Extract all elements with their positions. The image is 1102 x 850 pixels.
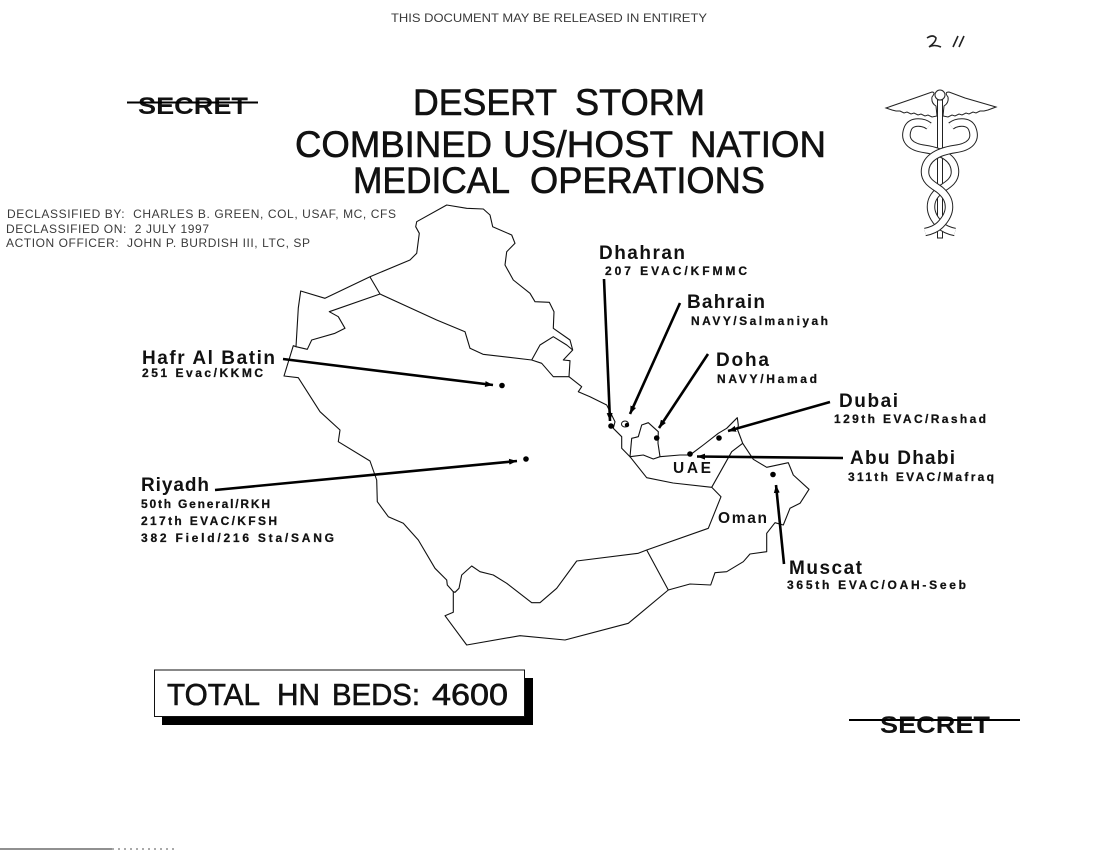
- callout: Muscat: Muscat: [789, 558, 863, 579]
- declassification block: DECLASSIFIED BY: CHARLES B. GREEN, COL, USAF, MC, CFS: [7, 207, 396, 221]
- classification stamp: left: SECRET: [138, 93, 248, 120]
- callout: Riyadh: 382 Field/216 Sta/SANG: [141, 531, 334, 545]
- callout: Riyadh: 217th EVAC/KFSH: [141, 514, 277, 528]
- total beds box: BEDS:: [332, 678, 420, 712]
- callout: Bahrain: Bahrain: [687, 292, 765, 313]
- callout: Riyadh: Riyadh: [141, 475, 209, 496]
- title: STORM: [575, 82, 705, 123]
- callout: Doha: Doha: [716, 350, 769, 371]
- callout: Muscat: [770, 472, 966, 592]
- callout: Hafr Al Batin: Hafr Al Batin: [142, 348, 275, 369]
- callout: Dubai: Dubai: [839, 391, 898, 412]
- total beds box: [154, 670, 533, 725]
- callout: Dhahran: 207 EVAC/KFMMC: [605, 264, 747, 278]
- icon: caduceus: [886, 90, 996, 238]
- callout: Dubai: 129th EVAC/Rashad: [834, 412, 986, 426]
- callout: Dhahran: [599, 243, 747, 429]
- callout: Dhahran: Dhahran: [599, 243, 685, 264]
- callout: Abu Dhabi: 311th EVAC/Mafraq: [848, 470, 994, 484]
- title: MEDICAL: [353, 160, 510, 201]
- declassification block: ACTION OFFICER: JOHN P. BURDISH III, LTC, SP: [6, 236, 310, 250]
- callout: Muscat: 365th EVAC/OAH-Seeb: [787, 578, 966, 592]
- callout: Abu Dhabi: Abu Dhabi: [850, 448, 955, 469]
- handwritten page number: [927, 36, 964, 47]
- release notice: THIS DOCUMENT MAY BE RELEASED IN ENTIRETY: [391, 11, 707, 25]
- title: COMBINED: [295, 124, 492, 165]
- title: DESERT: [413, 82, 557, 123]
- callout: Abu Dhabi: [687, 448, 994, 484]
- callout: Bahrain: [622, 292, 828, 427]
- title: [295, 82, 826, 201]
- total beds box: HN: [277, 678, 320, 712]
- title: OPERATIONS: [530, 160, 765, 201]
- title: NATION: [690, 124, 826, 165]
- callout: Dubai: [716, 391, 986, 441]
- country label: UAE: UAE: [673, 460, 711, 477]
- classification stamp: right: SECRET: [880, 712, 990, 739]
- callout: Doha: [654, 350, 817, 441]
- total beds box: 4600: [432, 678, 508, 712]
- callout: Doha: NAVY/Hamad: [717, 372, 817, 386]
- country label: Oman: Oman: [718, 510, 767, 527]
- callout: Riyadh: [141, 456, 529, 545]
- declassification block: DECLASSIFIED ON: 2 JULY 1997: [6, 222, 209, 236]
- declassification block: [6, 207, 396, 250]
- callout: Bahrain: NAVY/Salmaniyah: [691, 314, 828, 328]
- title: US/HOST: [503, 124, 673, 165]
- callout: Hafr Al Batin: [142, 348, 505, 388]
- callout: Riyadh: 50th General/RKH: [141, 497, 270, 511]
- total beds box: TOTAL: [167, 678, 260, 712]
- callout: Hafr Al Batin: 251 Evac/KKMC: [142, 366, 263, 380]
- map: Arabian Peninsula outline and borders: [284, 205, 809, 645]
